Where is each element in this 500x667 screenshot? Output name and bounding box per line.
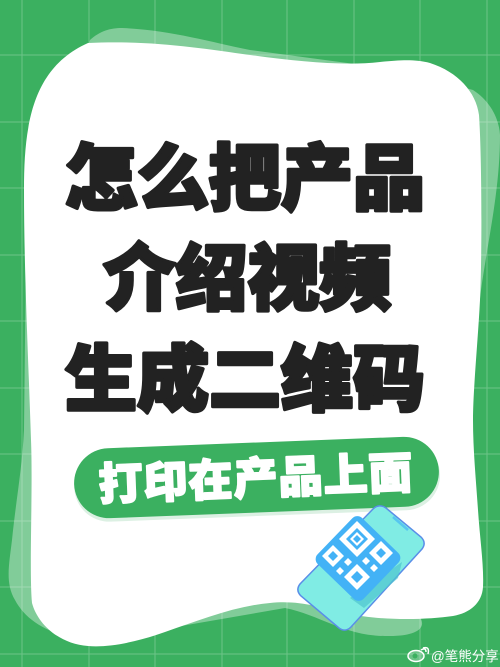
QR card <box>313 513 403 604</box>
QR modules <box>322 521 393 590</box>
phone body <box>298 506 424 630</box>
pill text: 打印在产品上面 <box>98 449 414 510</box>
title line 2: 介绍视频 <box>103 240 392 320</box>
watermark text: @笔熊分享 <box>431 648 499 664</box>
icon: weibo logo <box>408 648 428 662</box>
QR card shadow <box>350 562 402 608</box>
icon: phone with QR code <box>298 506 424 630</box>
title line 1: 怎么把产品 <box>65 140 425 220</box>
watermark <box>408 648 499 664</box>
pill subtitle <box>73 435 441 523</box>
title line 3: 生成二维码 <box>65 341 425 421</box>
phone notch <box>393 517 408 530</box>
